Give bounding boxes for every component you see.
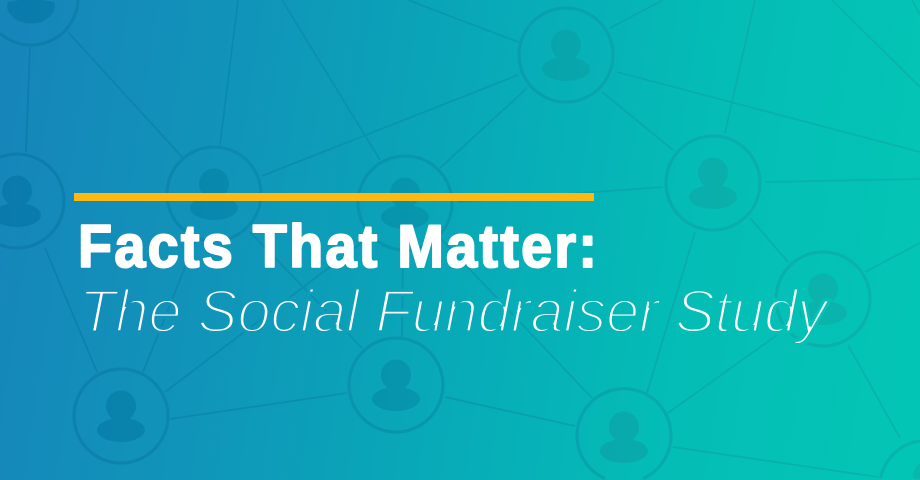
person node: top left (0, 0, 78, 45)
title: Facts That Matter: (78, 214, 597, 280)
person node: left edge (0, 154, 64, 248)
person node: top centre (519, 8, 613, 102)
subtitle: The Social Fundraiser Study (79, 278, 831, 345)
person node: right centre (666, 136, 760, 230)
person node: bottom right corner (880, 441, 920, 479)
person node: right (776, 252, 870, 346)
person node: bottom right (577, 389, 671, 479)
person node: centre left (167, 147, 261, 241)
yellow accent bar (74, 193, 594, 201)
person node: bottom left (74, 369, 168, 463)
person node: bottom centre (349, 338, 443, 432)
person node: centre (358, 156, 452, 250)
